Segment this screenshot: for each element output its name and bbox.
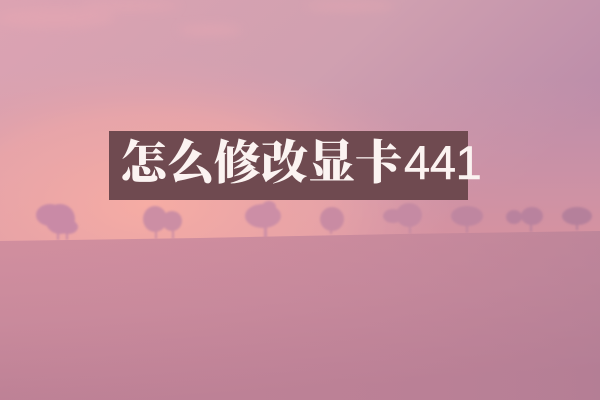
tree 2 [143,206,182,239]
tree 1 [36,204,78,240]
title: 怎么修改显卡441 [120,136,482,189]
sky [0,0,600,245]
clouds [0,1,395,36]
tree 3 [245,201,281,239]
tree 6 [451,206,483,233]
tree line [36,201,592,240]
tree 7 [506,207,543,232]
tree 5 [383,203,422,234]
ground [0,231,600,400]
title band [109,131,468,200]
tree 4 [320,207,344,234]
tree 8 [562,207,592,230]
